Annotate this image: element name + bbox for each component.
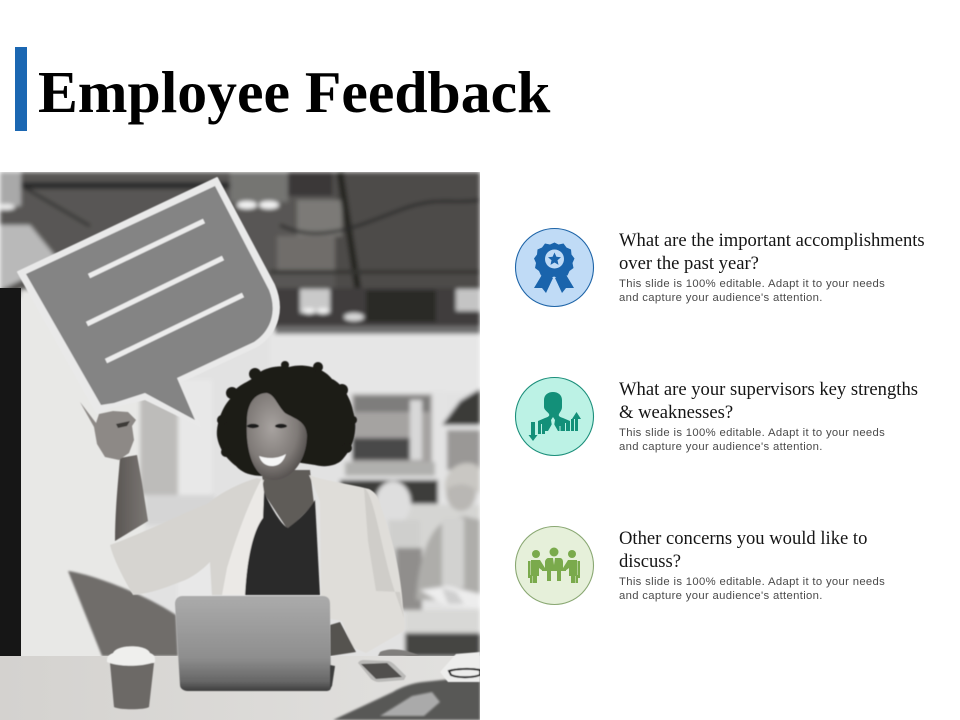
heading 1 bbox=[619, 230, 925, 274]
heading 2: & weaknesses? bbox=[619, 402, 733, 422]
description 3: This slide is 100% editable. Adapt it to your needs bbox=[619, 576, 885, 588]
phone bbox=[358, 660, 406, 682]
blazer bbox=[110, 478, 264, 595]
heading 2 bbox=[619, 379, 918, 422]
chair bbox=[68, 571, 178, 656]
face bbox=[247, 393, 307, 480]
heading 3 bbox=[619, 528, 867, 572]
forearm bbox=[330, 622, 356, 656]
speech bubble sign bbox=[18, 178, 279, 426]
bubble lines bbox=[87, 221, 243, 361]
office background bbox=[0, 172, 480, 720]
icon: ribbon badge bbox=[514, 228, 594, 307]
hand bbox=[80, 402, 136, 460]
title: Employee Feedback bbox=[38, 59, 550, 125]
description 1: This slide is 100% editable. Adapt it to your needs bbox=[619, 278, 885, 290]
hair bbox=[217, 361, 357, 476]
background colleague bbox=[416, 516, 480, 600]
desk bbox=[0, 656, 480, 720]
description 2: This slide is 100% editable. Adapt it to your needs bbox=[619, 427, 885, 439]
heading 1: What are the important accomplishments bbox=[619, 230, 925, 251]
description 3: and capture your audience's attention. bbox=[619, 590, 823, 602]
glasses and papers bbox=[440, 652, 480, 682]
item 2: supervisors bbox=[514, 377, 918, 456]
icon: person with charts bbox=[514, 377, 594, 456]
description 2 bbox=[619, 427, 885, 453]
description 3 bbox=[619, 576, 885, 602]
description 1: and capture your audience's attention. bbox=[619, 292, 823, 304]
description 1 bbox=[619, 278, 885, 304]
raised arm bbox=[115, 455, 148, 541]
heading 1: over the past year? bbox=[619, 252, 759, 274]
tablet on desk bbox=[333, 676, 480, 720]
item 1: accomplishments bbox=[514, 228, 925, 307]
item 3: other concerns bbox=[514, 526, 885, 605]
laptop bbox=[175, 596, 335, 691]
coffee cup bbox=[107, 646, 155, 709]
heading 2: What are your supervisors key strengths bbox=[619, 379, 918, 400]
neck bbox=[262, 470, 314, 530]
icon: people at table bbox=[514, 526, 594, 605]
dark top bbox=[245, 492, 320, 595]
heading 3: discuss? bbox=[619, 550, 681, 572]
left lapel bbox=[222, 478, 264, 595]
heading 3: Other concerns you would like to bbox=[619, 528, 867, 549]
woman bbox=[80, 361, 420, 656]
title accent bar bbox=[15, 47, 27, 131]
description 2: and capture your audience's attention. bbox=[619, 441, 823, 453]
photo: woman holding speech bubble bbox=[0, 172, 480, 720]
